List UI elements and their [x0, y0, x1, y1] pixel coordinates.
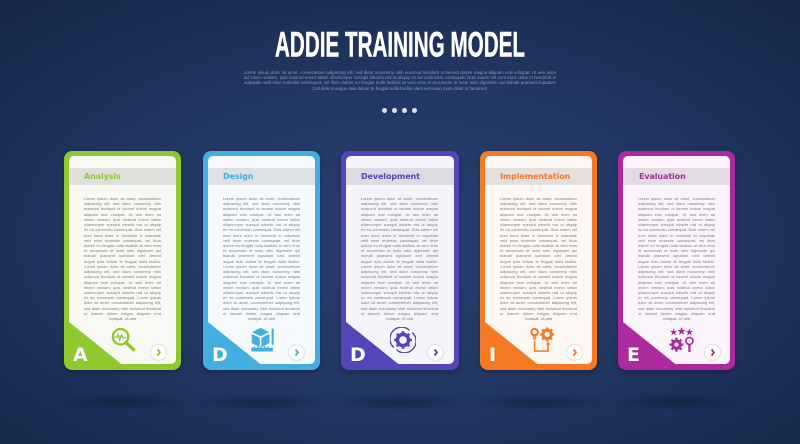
panel: Implementation: [480, 151, 597, 370]
letter I: I: [489, 344, 496, 366]
letter D: D: [350, 344, 366, 366]
button arrow: [705, 345, 720, 360]
button arrow: [289, 345, 304, 360]
text: Implementation body: Lorem ipsum dolor sit amet, consectetuer adipiscing elit, sed diam nonummy nibh euismod tincidunt ut laoreet dolore magna aliquam erat volutpat. Ut wisi enim ad minim veniam, quis nostrud exerci tation ullamcorper suscipit lobortis nisl ut aliquip ex ea commodo consequat. Duis autem vel eum iriure dolor in hendrerit in vulputate velit esse molestie consequat, vel illum dolore eu feugiat nulla facilisis at vero eros et accumsan et iusto odio dignissim qui blandit praesent luptatum zzril delenit augue duis dolore te feugait nulla facilisi. Lorem ipsum dolor sit amet, consectetuer adipiscing elit, sed diam nonummy nibh euismod tincidunt ut laoreet dolore magna aliquam erat volutpat. Ut wisi enim ad minim veniam, quis nostrud exerci tation ullamcorper suscipit lobortis nisl ut aliquip ex ea commodo consequat. Lorem ipsum dolor sit amet, consectetuer adipiscing elit, sed diam nonummy nibh euismod tincidunt ut laoreet dolore magna aliquam erat volutpat. Ut wisi: [500, 196, 577, 321]
letter A: A: [73, 344, 88, 366]
icon: stars, gear and magnifier: [669, 327, 694, 352]
heading: Implementation: Implementation: [500, 172, 570, 181]
pagination dots: [382, 108, 417, 113]
corner triangle: [346, 322, 398, 364]
button arrow: [151, 345, 166, 360]
panel: Evaluation: [618, 151, 735, 370]
button arrow: [428, 345, 443, 360]
corner triangle: [208, 322, 260, 364]
icon: bulb and gear: [530, 328, 554, 352]
panel: Development: [341, 151, 459, 370]
text: Development body: Lorem ipsum dolor sit amet, consectetuer adipiscing elit, sed diam nonummy nibh euismod tincidunt ut laoreet dolore magna aliquam erat volutpat. Ut wisi enim ad minim veniam, quis nostrud exerci tation ullamcorper suscipit lobortis nisl ut aliquip ex ea commodo consequat. Duis autem vel eum iriure dolor in hendrerit in vulputate velit esse molestie consequat, vel illum dolore eu feugiat nulla facilisis at vero eros et accumsan et iusto odio dignissim qui blandit praesent luptatum zzril delenit augue duis dolore te feugait nulla facilisi. Lorem ipsum dolor sit amet, consectetuer adipiscing elit, sed diam nonummy nibh euismod tincidunt ut laoreet dolore magna aliquam erat volutpat. Ut wisi enim ad minim veniam, quis nostrud exerci tation ullamcorper suscipit lobortis nisl ut aliquip ex ea commodo consequat. Lorem ipsum dolor sit amet, consectetuer adipiscing elit, sed diam nonummy nibh euismod tincidunt ut laoreet dolore magna aliquam erat volutpat. Ut wisi: [361, 196, 438, 321]
intro text: Lorem ipsum dolor sit amet, consectetuer adipiscing elit, sed diam nonummy nibh euismod tincidunt ut laoreet dolore magna aliquam erat volutpat. Ut wisi enim ad minim veniam, quis nostrud exerci tation ullamcorper suscipit lobortis nisl ut aliquip ex ea commodo consequat. Duis autem vel eum iriure dolor in hendrerit in vulputate velit esse molestie consequat, vel illum dolore eu feugiat nulla facilisis at vero eros et accumsan et iusto odio dignissim qui blandit praesent luptatum zzril delenit augue duis dolore te feugait nulla facilisi uterx vel mauri more dolor in hendrerit.: [244, 70, 556, 91]
letter E: E: [627, 344, 640, 366]
corner triangle: [485, 322, 538, 364]
letter D: D: [212, 344, 228, 366]
button arrow: [567, 345, 582, 360]
icon: magnifier with pulse: [112, 328, 136, 352]
heading: Evaluation: Evaluation: [639, 172, 686, 181]
icon: cube and ruler: [251, 328, 274, 352]
corner triangle: [623, 322, 676, 364]
heading: Design: Design: [223, 172, 253, 181]
text: Analysis body: Lorem ipsum dolor sit amet, consectetuer adipiscing elit, sed diam nonummy nibh euismod tincidunt ut laoreet dolore magna aliquam erat volutpat. Ut wisi enim ad minim veniam, quis nostrud exerci tation ullamcorper suscipit lobortis nisl ut aliquip ex ea commodo consequat. Duis autem vel eum iriure dolor in hendrerit in vulputate velit esse molestie consequat, vel illum dolore eu feugiat nulla facilisis at vero eros et accumsan et iusto odio dignissim qui blandit praesent luptatum zzril delenit augue duis dolore te feugait nulla facilisi. Lorem ipsum dolor sit amet, consectetuer adipiscing elit, sed diam nonummy nibh euismod tincidunt ut laoreet dolore magna aliquam erat volutpat. Ut wisi enim ad minim veniam, quis nostrud exerci tation ullamcorper suscipit lobortis nisl ut aliquip ex ea commodo consequat. Lorem ipsum dolor sit amet, consectetuer adipiscing elit, sed diam nonummy nibh euismod tincidunt ut laoreet dolore magna aliquam erat volutpat. Ut wisi: [84, 196, 161, 321]
text: Evaluation body: Lorem ipsum dolor sit amet, consectetuer adipiscing elit, sed diam nonummy nibh euismod tincidunt ut laoreet dolore magna aliquam erat volutpat. Ut wisi enim ad minim veniam, quis nostrud exerci tation ullamcorper suscipit lobortis nisl ut aliquip ex ea commodo consequat. Duis autem vel eum iriure dolor in hendrerit in vulputate velit esse molestie consequat, vel illum dolore eu feugiat nulla facilisis at vero eros et accumsan et iusto odio dignissim qui blandit praesent luptatum zzril delenit augue duis dolore te feugait nulla facilisi. Lorem ipsum dolor sit amet, consectetuer adipiscing elit, sed diam nonummy nibh euismod tincidunt ut laoreet dolore magna aliquam erat volutpat. Ut wisi enim ad minim veniam, quis nostrud exerci tation ullamcorper suscipit lobortis nisl ut aliquip ex ea commodo consequat. Lorem ipsum dolor sit amet, consectetuer adipiscing elit, sed diam nonummy nibh euismod tincidunt ut laoreet dolore magna aliquam erat volutpat. Ut wisi: [638, 196, 715, 321]
text: Design body: Lorem ipsum dolor sit amet, consectetuer adipiscing elit, sed diam nonummy nibh euismod tincidunt ut laoreet dolore magna aliquam erat volutpat. Ut wisi enim ad minim veniam, quis nostrud exerci tation ullamcorper suscipit lobortis nisl ut aliquip ex ea commodo consequat. Duis autem vel eum iriure dolor in hendrerit in vulputate velit esse molestie consequat, vel illum dolore eu feugiat nulla facilisis at vero eros et accumsan et iusto odio dignissim qui blandit praesent luptatum zzril delenit augue duis dolore te feugait nulla facilisi. Lorem ipsum dolor sit amet, consectetuer adipiscing elit, sed diam nonummy nibh euismod tincidunt ut laoreet dolore magna aliquam erat volutpat. Ut wisi enim ad minim veniam, quis nostrud exerci tation ullamcorper suscipit lobortis nisl ut aliquip ex ea commodo consequat. Lorem ipsum dolor sit amet, consectetuer adipiscing elit, sed diam nonummy nibh euismod tincidunt ut laoreet dolore magna aliquam erat volutpat. Ut wisi: [223, 196, 300, 321]
corner triangle: [69, 322, 122, 364]
panel: Design: [203, 151, 320, 370]
panel: Analysis: [64, 151, 181, 370]
icon: gear with cycle arrows: [390, 327, 416, 353]
heading: Development: Development: [361, 172, 420, 181]
heading: Analysis: Analysis: [84, 172, 121, 181]
